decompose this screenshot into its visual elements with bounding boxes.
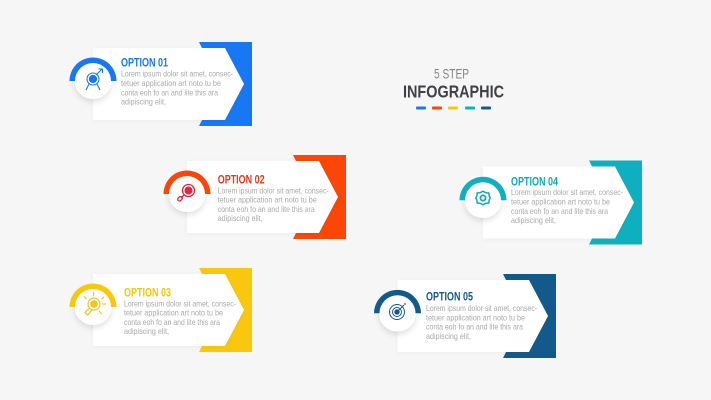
- title: INFOGRAPHIC: [403, 82, 504, 102]
- colored back shape: [293, 155, 346, 239]
- body text: Lorem ipsum dolor sit amet, consec-: [218, 185, 329, 195]
- panel: option 03: [70, 268, 252, 352]
- panel: option 05: [374, 274, 556, 358]
- white arrow card: [483, 166, 634, 238]
- body text: Lorem ipsum dolor sit amet, consec-: [426, 303, 537, 313]
- body text: conta eoh fo an and lite this ara: [426, 322, 523, 332]
- white arrow card: [93, 48, 244, 120]
- body text: conta eoh fo an and lite this ara: [121, 87, 218, 97]
- icon circle: [74, 62, 112, 99]
- arc: [460, 177, 506, 200]
- heading: OPTION 03: [124, 286, 171, 299]
- colored back shape: [503, 274, 556, 358]
- body text: [124, 298, 236, 336]
- body text: tetuer application art noto tu be: [426, 312, 525, 322]
- body text: tetuer application art noto tu be: [124, 308, 223, 318]
- body text: conta eoh fo an and lite this ara: [218, 204, 315, 214]
- icon circle: [379, 294, 416, 332]
- body text: adipiscing elit,: [218, 213, 263, 223]
- body text: adipiscing elit,: [426, 331, 471, 341]
- body text: Lorem ipsum dolor sit amet, consec-: [124, 298, 236, 308]
- body text: [121, 69, 233, 107]
- white arrow card: [187, 161, 338, 233]
- body text: [511, 187, 623, 225]
- title block: [403, 65, 504, 110]
- icon: sun bulb: [84, 292, 106, 315]
- icon circle: [74, 288, 112, 325]
- icon circle: [464, 181, 502, 218]
- body text: tetuer application art noto tu be: [121, 78, 221, 88]
- panel: option 04: [460, 160, 642, 244]
- arc: [70, 58, 116, 81]
- subtitle: 5 STEP: [434, 65, 469, 81]
- heading: OPTION 02: [218, 173, 265, 186]
- panel: option 01: [70, 42, 252, 126]
- arc: [374, 290, 421, 313]
- icon circle: [168, 175, 206, 212]
- panel: option 02: [164, 155, 346, 239]
- heading: OPTION 05: [426, 291, 473, 304]
- icon: gear: [476, 191, 490, 205]
- body text: Lorem ipsum dolor sit amet, consec-: [511, 187, 623, 197]
- colored back shape: [199, 268, 252, 352]
- body text: conta eoh fo an and lite this ara: [124, 317, 220, 327]
- colored dashes: [416, 106, 491, 110]
- white arrow card: [398, 280, 548, 352]
- heading: OPTION 01: [121, 57, 168, 70]
- body text: [218, 185, 329, 223]
- arc: [70, 284, 116, 307]
- white arrow card: [93, 274, 244, 346]
- body text: conta eoh fo an and lite this ara: [511, 206, 608, 216]
- colored back shape: [199, 42, 252, 126]
- body text: adipiscing elit,: [121, 97, 166, 107]
- icon: target: [390, 303, 406, 320]
- heading: OPTION 04: [511, 176, 558, 189]
- body text: tetuer application art noto tu be: [511, 196, 610, 206]
- icon: target with arrow: [86, 69, 102, 90]
- body text: tetuer application art noto tu be: [218, 195, 317, 205]
- arc: [164, 171, 210, 194]
- colored back shape: [589, 160, 642, 244]
- body text: Lorem ipsum dolor sit amet, consec-: [121, 69, 233, 79]
- body text: [426, 303, 537, 341]
- body text: adipiscing elit,: [511, 215, 556, 225]
- icon: magnifier: [177, 184, 194, 202]
- body text: adipiscing elit,: [124, 326, 169, 336]
